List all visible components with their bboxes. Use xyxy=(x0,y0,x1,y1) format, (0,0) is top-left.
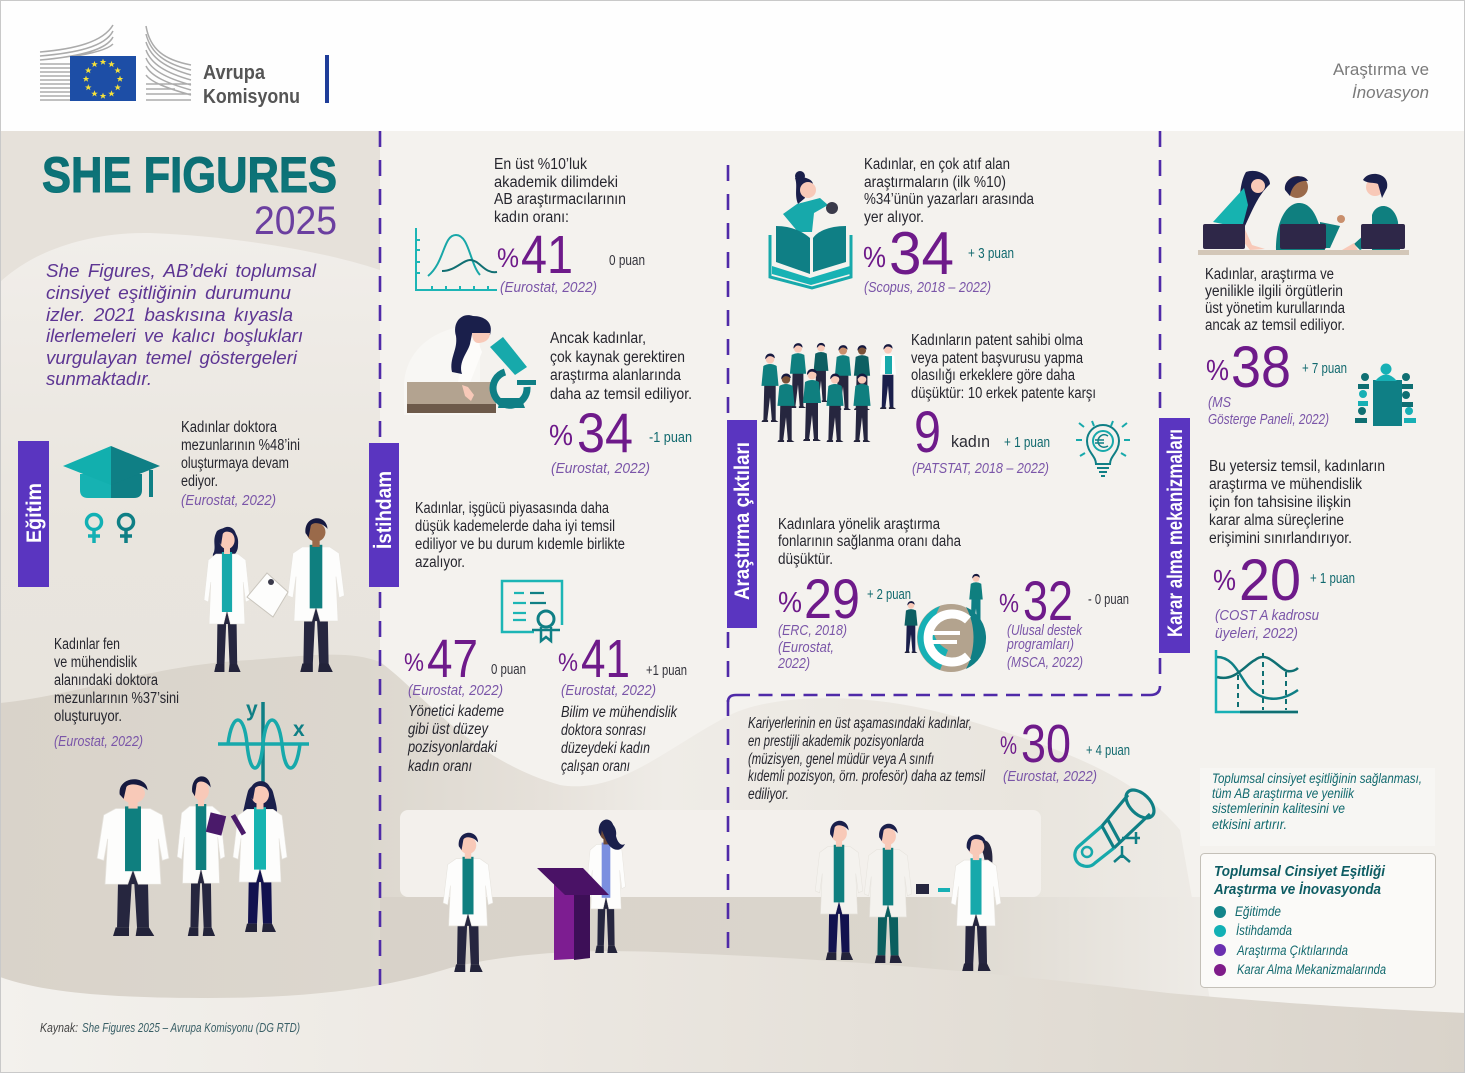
stat: patents: Kadınların patent sahibi olma xyxy=(911,332,1083,349)
text: science and engineering graduates: Kadınlar fen xyxy=(54,636,120,653)
stat: research funding intro: fonlarının sağlanma oranı daha xyxy=(778,533,961,550)
text: science and engineering graduates: ve mühendislik xyxy=(54,654,137,671)
stat: funding 29 xyxy=(777,567,911,672)
stat: patents: veya patent başvurusu yapma xyxy=(911,350,1083,367)
callout: gender equality enhances quality: tüm AB araştırma ve yenilik xyxy=(1212,786,1355,801)
stat: top academic positions 30: Kariyerlerinin en üst aşamasındaki kadınlar, xyxy=(748,715,972,732)
text: doctoral graduates: ediyor. xyxy=(181,473,218,490)
stat: top academic positions 30 xyxy=(748,714,1130,803)
stat: research funding intro xyxy=(778,516,961,568)
stat: funding 32 xyxy=(999,569,1129,671)
stat: postdoctoral 41: doktora sonrası xyxy=(561,722,646,739)
legend: İstihdamda xyxy=(1236,923,1292,938)
text: science and engineering graduates: alanındaki doktora xyxy=(54,672,158,689)
stat: top academic positions 30: % xyxy=(1000,732,1017,760)
stat: highly cited authors: (Scopus, 2018 – 2022) xyxy=(864,279,991,296)
logo: European Commission xyxy=(40,25,329,108)
logo: European Commission: Komisyonu xyxy=(203,86,300,108)
stat: postdoctoral 41: 41 xyxy=(581,629,630,689)
stat: resource-intensive research: % xyxy=(549,420,573,452)
legend: Eğitimde xyxy=(1235,904,1281,919)
callout: gender equality enhances quality: Toplumsal cinsiyet eşitliğinin sağlanması, xyxy=(1212,771,1422,786)
stat: research funding intro: düşüktür. xyxy=(778,551,833,568)
stat: top academic positions 30: en prestijli akademik pozisyonlarda xyxy=(748,733,924,750)
title xyxy=(42,147,337,243)
stat: top academic positions 30: kıdemli pozisyon, örn. profesör) daha az temsil xyxy=(748,768,985,785)
text: science and engineering graduates: (Eurostat, 2022) xyxy=(54,733,143,750)
stat: top academic positions 30: + 4 puan xyxy=(1086,743,1130,759)
stat: senior positions 47: pozisyonlardaki xyxy=(407,739,497,756)
stat: postdoctoral 41: (Eurostat, 2022) xyxy=(561,682,656,699)
stat: COST A members: 20 xyxy=(1239,548,1301,613)
stat: postdoctoral 41: düzeydeki kadın xyxy=(561,740,650,757)
stat: COST A members: + 1 puan xyxy=(1310,571,1355,587)
stat: top academic grade: akademik dilimdeki xyxy=(494,174,618,191)
stat: patents: düşüktür: 10 erkek patente karşı xyxy=(911,385,1096,402)
stat: management boards: Kadınlar, araştırma ve xyxy=(1205,266,1334,283)
icon: euro coin with figures xyxy=(905,574,986,672)
illustration: woman with open book xyxy=(770,171,851,288)
stat: funding 32: (MSCA, 2022) xyxy=(1007,654,1083,671)
intro text xyxy=(46,261,317,389)
illustration: doctor and speaker at podium xyxy=(443,820,625,972)
panel: İstihdam xyxy=(369,156,692,972)
text: science and engineering graduates xyxy=(54,636,179,750)
panel: Araştırma çıktıları xyxy=(727,156,1159,971)
stat: patents: olasılığı erkeklere göre daha xyxy=(911,367,1075,384)
illustration: meeting with laptops xyxy=(1198,171,1409,255)
stat: research funding intro: Kadınlara yönelik araştırma xyxy=(778,516,940,533)
illustration: three scientists xyxy=(97,776,287,936)
stat: management boards: + 7 puan xyxy=(1302,361,1347,377)
source note: Kaynak: xyxy=(40,1021,78,1035)
intro text: ilerlemeleri ve kalıcı boşlukları xyxy=(46,326,303,346)
stat: COST A members: için fon tahsisine ilişkin xyxy=(1209,494,1351,511)
stat: funding 29: % xyxy=(778,587,802,619)
stat: top academic grade: En üst %10’luk xyxy=(494,156,587,173)
stat: senior positions 47 xyxy=(404,629,526,775)
section label: İstihdam xyxy=(369,443,399,587)
stat: patents: 9 xyxy=(914,400,941,465)
text: seniority intro: ediliyor ve bu durum kıdemle birlikte xyxy=(415,536,625,553)
icon: telescope xyxy=(1075,785,1159,866)
stat: COST A members: araştırma ve mühendislik xyxy=(1209,476,1362,493)
text: doctoral graduates: mezunlarının %48’ini xyxy=(181,437,300,454)
text: seniority intro: azalıyor. xyxy=(415,554,465,571)
stat: funding 32: (Ulusal destek xyxy=(1007,622,1083,639)
stat: senior positions 47: % xyxy=(404,649,424,677)
stat: senior positions 47: 0 puan xyxy=(491,662,526,678)
stat: senior positions 47: Yönetici kademe xyxy=(408,703,504,720)
stat: resource-intensive research: (Eurostat, 2022) xyxy=(551,460,650,477)
stat: management boards: % xyxy=(1206,355,1229,387)
stat: COST A members xyxy=(1209,458,1385,642)
stat: patents xyxy=(911,332,1096,477)
legend: Toplumsal Cinsiyet Eşitliği xyxy=(1214,864,1386,880)
stat: top academic grade: AB araştırmacılarının xyxy=(494,191,626,208)
legend: Araştırma Çıktılarında xyxy=(1236,943,1348,958)
stat: funding 29: 2022) xyxy=(777,655,810,672)
text: seniority intro xyxy=(415,500,625,571)
stat: top academic grade: (Eurostat, 2022) xyxy=(500,279,597,296)
source note xyxy=(40,1021,300,1035)
stat: highly cited authors: % xyxy=(863,242,886,274)
stat: COST A members: karar alma süreçlerine xyxy=(1209,512,1344,529)
stat: management boards: üst yönetim kurullarında xyxy=(1205,300,1345,317)
stat: patents: + 1 puan xyxy=(1004,435,1050,451)
text: doctoral graduates: Kadınlar doktora xyxy=(181,419,277,436)
section label: Karar alma mekanizmaları xyxy=(1159,418,1190,653)
text: seniority intro: düşük kademelerde daha iyi temsil xyxy=(415,518,615,535)
icon: certificate xyxy=(502,581,562,641)
stat: COST A members: (COST A kadrosu xyxy=(1215,607,1320,624)
intro text: cinsiyet eşitliğinin durumunu xyxy=(46,283,291,303)
stat: highly cited authors: 34 xyxy=(889,220,954,287)
stat: postdoctoral 41: Bilim ve mühendislik xyxy=(561,704,678,721)
title: SHE FIGURES xyxy=(42,147,337,203)
text: seniority intro: Kadınlar, işgücü piyasasında daha xyxy=(415,500,609,517)
stat: highly cited authors: yer alıyor. xyxy=(864,209,924,226)
stat: COST A members: üyeleri, 2022) xyxy=(1215,625,1298,642)
stat: COST A members: Bu yetersiz temsil, kadınların xyxy=(1209,458,1385,475)
section label: Eğitim: Eğitim xyxy=(23,483,46,543)
stat: funding 29: 29 xyxy=(804,567,860,630)
stat: resource-intensive research: daha az temsil ediliyor. xyxy=(550,386,692,403)
stat: funding 29: (Eurostat, xyxy=(778,639,834,656)
icon: graduation cap xyxy=(63,446,160,543)
stat: resource-intensive research: çok kaynak gerektiren xyxy=(550,349,685,366)
section label: Karar alma mekanizmaları: Karar alma mekanizmaları xyxy=(1164,429,1187,637)
stat: management boards: Gösterge Paneli, 2022) xyxy=(1208,411,1329,428)
stat: senior positions 47: (Eurostat, 2022) xyxy=(408,682,503,699)
stat: resource-intensive research: Ancak kadınlar, xyxy=(550,330,646,347)
stat: highly cited authors: araştırmaların (ilk %10) xyxy=(864,174,1006,191)
stat: patents: (PATSTAT, 2018 – 2022) xyxy=(912,460,1049,477)
stat: top academic grade xyxy=(494,156,645,296)
legend: Karar Alma Mekanizmalarında xyxy=(1237,962,1386,977)
stat: management boards: ancak az temsil ediliyor. xyxy=(1205,317,1345,334)
stat: funding 29: + 2 puan xyxy=(867,587,911,603)
intro text: She Figures, AB’deki toplumsal xyxy=(46,261,317,281)
stat: resource-intensive research: araştırma alanlarında xyxy=(550,367,681,384)
illustration: two doctors with clipboard xyxy=(204,518,344,672)
text: science and engineering graduates: mezunlarının %37’sini xyxy=(54,690,179,707)
panel: Karar alma mekanizmaları xyxy=(1159,171,1436,988)
illustration: crowd of researchers xyxy=(761,343,896,442)
illustration: woman at microscope xyxy=(404,315,536,415)
stat: resource-intensive research: -1 puan xyxy=(649,430,692,446)
intro text: sunmaktadır. xyxy=(46,369,152,389)
stat: highly cited authors: + 3 puan xyxy=(968,246,1014,262)
stat: resource-intensive research xyxy=(549,330,692,477)
text: doctoral graduates: oluşturmaya devam xyxy=(181,455,289,472)
section label: Araştırma çıktıları xyxy=(727,420,757,628)
stat: funding 32: - 0 puan xyxy=(1088,592,1129,608)
stat: COST A members: erişimini sınırlandırıyor. xyxy=(1209,530,1352,547)
stat: management boards: (MS xyxy=(1208,394,1231,411)
icon: distribution chart xyxy=(416,228,497,290)
stat: highly cited authors: %34’ünün yazarları arasında xyxy=(864,191,1034,208)
stat: COST A members: % xyxy=(1213,565,1236,597)
stat: highly cited authors: Kadınlar, en çok atıf alan xyxy=(864,156,1010,173)
header right: Araştırma ve İnovasyon xyxy=(1333,60,1429,102)
section label: Eğitim xyxy=(18,441,49,587)
logo: European Commission: Avrupa xyxy=(203,62,266,84)
stat: postdoctoral 41: çalışan oranı xyxy=(561,758,630,775)
stat: management boards xyxy=(1205,266,1347,428)
stat: funding 29: (ERC, 2018) xyxy=(778,622,847,639)
icon: boardroom table xyxy=(1355,364,1416,426)
stat: management boards: 38 xyxy=(1231,335,1291,400)
section label: İstihdam: İstihdam xyxy=(373,471,396,549)
stat: senior positions 47: 47 xyxy=(427,629,478,689)
stat: top academic grade: % xyxy=(497,243,519,273)
stat: patents: kadın xyxy=(951,432,990,451)
header right: Araştırma ve İnovasyon: Araştırma ve xyxy=(1333,60,1429,79)
callout: gender equality enhances quality: sistemlerinin kalitesini ve xyxy=(1212,801,1345,816)
dashed column dividers xyxy=(380,131,1160,985)
icon: sine wave graph: y xyxy=(246,698,258,721)
text: doctoral graduates: (Eurostat, 2022) xyxy=(181,492,276,509)
stat: top academic positions 30: (Eurostat, 2022) xyxy=(1003,768,1097,785)
stat: senior positions 47: gibi üst düzey xyxy=(408,721,489,738)
section label: Araştırma çıktıları: Araştırma çıktıları xyxy=(731,442,754,600)
icon: sine wave graph: x xyxy=(293,718,305,741)
header right: Araştırma ve İnovasyon: İnovasyon xyxy=(1352,83,1429,102)
stat: funding 32: % xyxy=(999,588,1019,618)
stat: top academic positions 30: ediliyor. xyxy=(748,786,789,803)
stat: postdoctoral 41: % xyxy=(558,649,578,677)
legend: Araştırma ve İnovasyonda xyxy=(1213,881,1381,898)
stat: postdoctoral 41 xyxy=(558,629,687,775)
stat: funding 32: 32 xyxy=(1023,569,1073,632)
callout: gender equality enhances quality: etkisini artırır. xyxy=(1212,817,1287,832)
stat: senior positions 47: kadın oranı xyxy=(408,758,472,775)
icon: light bulb with euro xyxy=(1076,421,1130,476)
stat: top academic grade: 0 puan xyxy=(609,253,645,269)
intro text: izler. 2021 baskısına kıyasla xyxy=(46,305,293,325)
stat: top academic grade: kadın oranı: xyxy=(494,209,569,226)
stat: top academic grade: 41 xyxy=(521,225,573,285)
stat: resource-intensive research: 34 xyxy=(577,401,633,464)
text: science and engineering graduates: oluşturuyor. xyxy=(54,708,122,725)
stat: top academic positions 30: (müzisyen, genel müdür veya A sınıfı xyxy=(748,751,934,768)
title: 2025 xyxy=(254,199,337,243)
stat: management boards: yenilikle ilgili örgütlerin xyxy=(1205,283,1343,300)
icon: sine wave graph xyxy=(218,698,309,786)
icon: line chart xyxy=(1216,650,1298,712)
stat: funding 32: programları) xyxy=(1006,636,1074,653)
legend xyxy=(1200,854,1436,988)
intro text: vurgulayan temel göstergeleri xyxy=(46,348,298,368)
stat: highly cited authors xyxy=(863,156,1034,296)
stat: top academic positions 30: 30 xyxy=(1021,714,1071,774)
source note: She Figures 2025 – Avrupa Komisyonu (DG RTD) xyxy=(82,1021,300,1035)
stat: postdoctoral 41: +1 puan xyxy=(646,663,687,679)
callout: gender equality enhances quality xyxy=(1212,771,1422,832)
panel: Eğitim xyxy=(18,419,344,936)
illustration: three researchers xyxy=(815,821,1001,971)
text: doctoral graduates xyxy=(181,419,300,509)
